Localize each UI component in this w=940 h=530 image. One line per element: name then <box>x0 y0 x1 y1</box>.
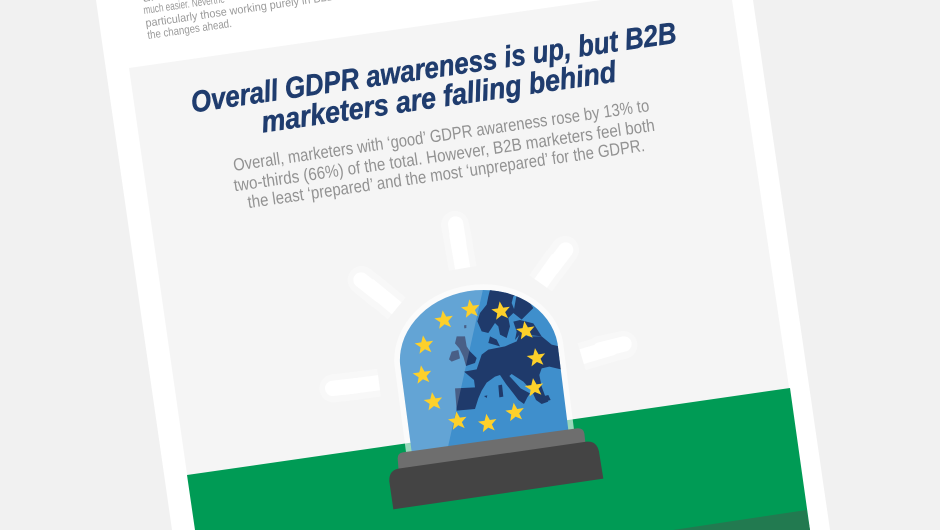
glass highlight <box>400 290 483 451</box>
glass dome <box>400 290 568 452</box>
light rays <box>333 224 624 388</box>
green band <box>187 388 810 530</box>
intro text block: the changes ahead. <box>147 18 233 42</box>
intro text block <box>142 0 335 42</box>
subtitle text: two-thirds (66%) of the total. However, B2B marketers feel both <box>232 115 656 195</box>
icon: EU siren <box>333 224 624 509</box>
title: Overall GDPR awareness is up, but B2B <box>189 17 678 119</box>
dome halo <box>400 290 568 452</box>
subtitle text: the least ‘prepared’ and the most ‘unprepared’ for the GDPR. <box>246 135 646 212</box>
subtitle text <box>232 95 656 212</box>
subtitle text: Overall, marketers with ‘good’ GDPR awareness rose by 13% to <box>232 95 650 175</box>
siren collar <box>398 428 586 472</box>
title <box>189 17 678 139</box>
infographic canvas <box>96 0 830 530</box>
map of Europe <box>449 290 561 411</box>
grey section panel <box>129 0 810 530</box>
EU stars <box>412 298 547 433</box>
dark green strip <box>673 510 810 530</box>
title: marketers are falling behind <box>259 56 619 139</box>
white paper sheet <box>96 0 830 530</box>
siren base <box>389 442 603 509</box>
